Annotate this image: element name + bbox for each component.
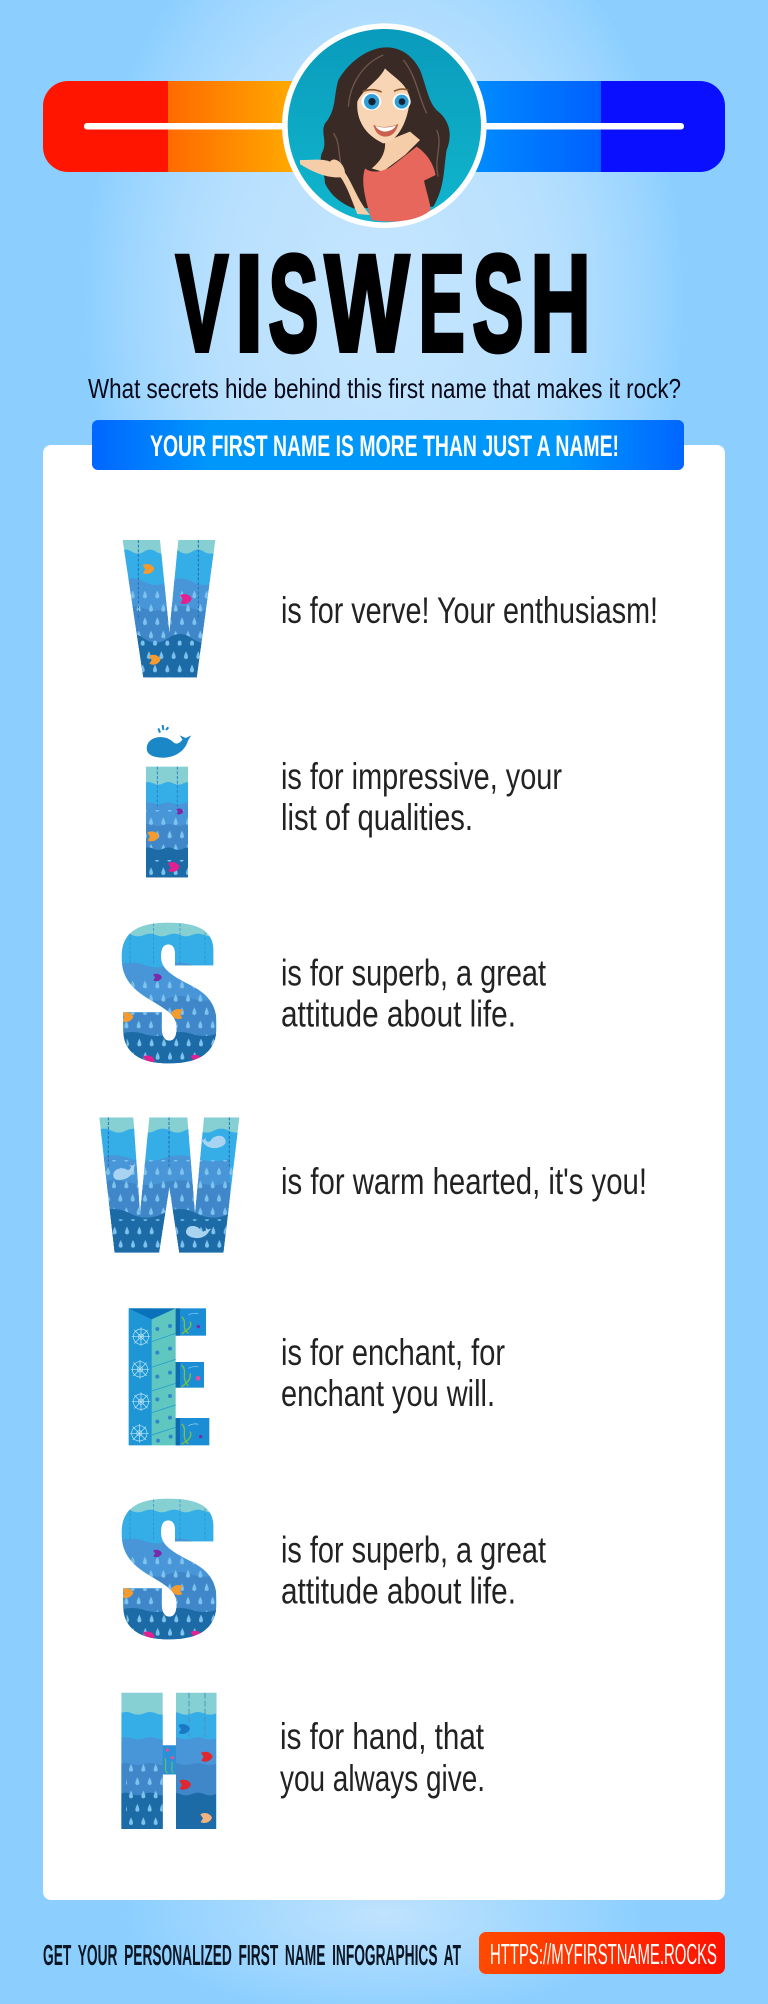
text: I second line: list of qualities. [281, 797, 473, 838]
text: S2: is for superb, a great [281, 1530, 547, 1570]
letter H [120, 1690, 218, 1830]
whale [147, 725, 191, 758]
banner [92, 420, 684, 470]
face [357, 68, 410, 143]
title: W [325, 228, 409, 380]
title: E [419, 228, 465, 380]
text: E second line: enchant you will. [281, 1373, 495, 1414]
title: H [531, 228, 591, 380]
title: S [472, 228, 524, 380]
white content panel [43, 445, 725, 1900]
arm and hand [300, 159, 370, 215]
text: S: is for superb, a great [281, 952, 547, 994]
footer URL button [479, 1932, 725, 1974]
eyes [361, 93, 381, 110]
neck [372, 132, 420, 172]
header colour bar [43, 81, 725, 172]
text: V: is for verve! Your enthusiasm! [281, 590, 658, 631]
text: E: is for enchant, for [281, 1332, 505, 1373]
letter S second [120, 1496, 225, 1646]
title: S [268, 228, 318, 380]
title: V [176, 228, 228, 380]
letter S [120, 920, 225, 1070]
text: I: is for impressive, your [281, 756, 562, 797]
coral top [363, 147, 436, 222]
portrait of woman in circle [282, 23, 487, 228]
text: S2 second line: attitude about life. [281, 1570, 516, 1612]
title [176, 228, 591, 380]
title: I [235, 228, 263, 380]
text: S second line: attitude about life. [281, 994, 516, 1034]
hair [321, 47, 450, 208]
text: W: is for warm hearted, it's you! [281, 1161, 647, 1202]
smile [373, 124, 398, 137]
text: H: is for hand, that [280, 1716, 485, 1757]
text: H second line: you always give. [280, 1758, 485, 1799]
letter W [99, 1117, 240, 1253]
hair highlights [333, 55, 439, 177]
letter I with whale [146, 724, 192, 878]
letter V [122, 540, 216, 678]
letter E [129, 1308, 209, 1445]
